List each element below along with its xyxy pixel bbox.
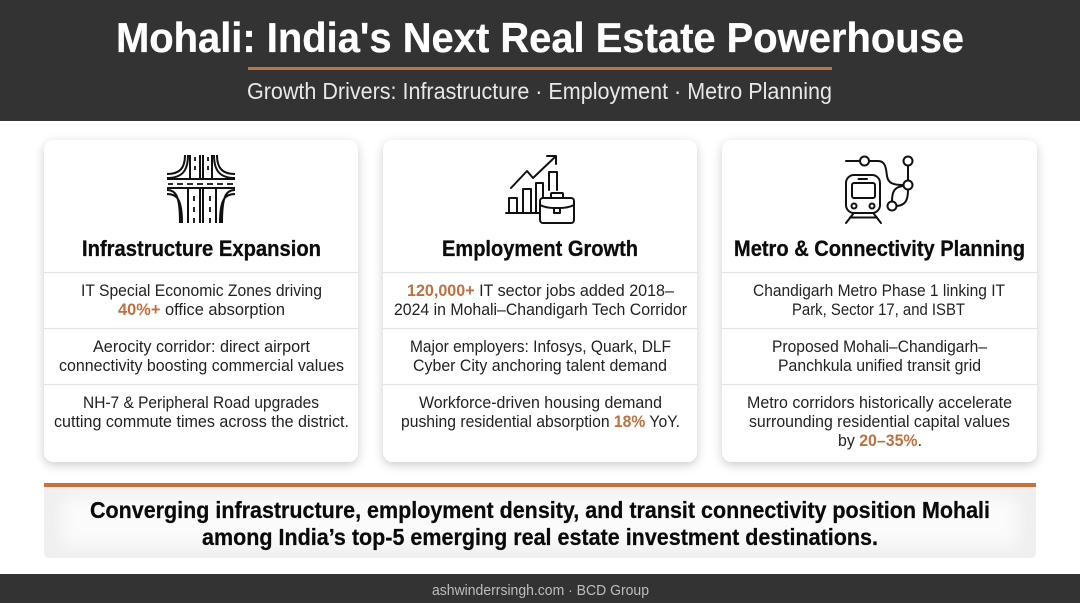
bullet 3: cutting commute times across the district. [54,413,349,431]
bullet 3 [54,394,349,431]
title underline [248,67,832,70]
bullet 1: 2024 in Mohali–Chandigarh Tech Corridor [394,301,687,319]
bullet 2 [410,338,671,375]
bullet 2: Major employers: Infosys, Quark, DLF [410,338,671,356]
bullet 3: by 20–35%. [838,432,922,450]
bullet 3 [747,394,1012,450]
bullet 1: 40%+ office absorption [118,301,285,319]
callout: conclusion [44,483,1036,558]
panel: metro and connectivity planning [722,140,1037,462]
heading: Metro & Connectivity Planning [734,236,1025,261]
panel: employment growth [383,140,697,462]
header band [0,0,1080,121]
dividers [722,272,1037,384]
bullet 1: IT Special Economic Zones driving [81,282,322,300]
subtitle: Growth Drivers: Infrastructure · Employment · Metro Planning [247,78,832,104]
bullet 2: Panchkula unified transit grid [778,357,981,375]
bullet 2: Aerocity corridor: direct airport [93,338,310,356]
bullet 3: NH-7 & Peripheral Road upgrades [83,394,319,412]
bullet 2 [772,338,988,375]
title: Mohali: India's Next Real Estate Powerhouse [116,14,964,61]
bullet 1: 120,000+ IT sector jobs added 2018– [407,282,675,300]
heading: Employment Growth [442,236,638,261]
bullet 3: Workforce-driven housing demand [419,394,662,412]
bullet 2: Proposed Mohali–Chandigarh– [772,338,988,356]
dividers [44,272,358,384]
bullet 1 [394,282,687,319]
bullet 1: Park, Sector 17, and ISBT [792,301,965,319]
dividers [383,272,697,384]
panel: infrastructure expansion [44,140,358,462]
bullet 2: connectivity boosting commercial values [59,357,344,375]
bullet 2: Cyber City anchoring talent demand [413,357,667,375]
icon: metro train and route map [846,156,912,223]
callout: conclusion: among India’s top-5 emerging real estate investment destinations. [202,524,878,550]
bullet 3: pushing residential absorption 18% YoY. [401,413,680,431]
callout text: Converging infrastructure, employment density, and transit connectivity position Mohali [90,497,990,523]
bullet 3 [401,394,680,431]
callout accent bar [44,483,1036,487]
bullet 3: Metro corridors historically accelerate [747,394,1012,412]
footer: ashwinderrsingh.com · BCD Group [432,583,649,599]
bullet 3: surrounding residential capital values [749,413,1010,431]
footer [0,574,1080,603]
bullet 1: Chandigarh Metro Phase 1 linking IT [753,282,1005,300]
bullet 1 [81,282,322,319]
icon: chart and briefcase [506,156,574,223]
icon: highway interchange [167,155,235,223]
bullet 1 [753,282,1005,319]
heading: Infrastructure Expansion [82,236,321,261]
bullet 2 [59,338,344,375]
